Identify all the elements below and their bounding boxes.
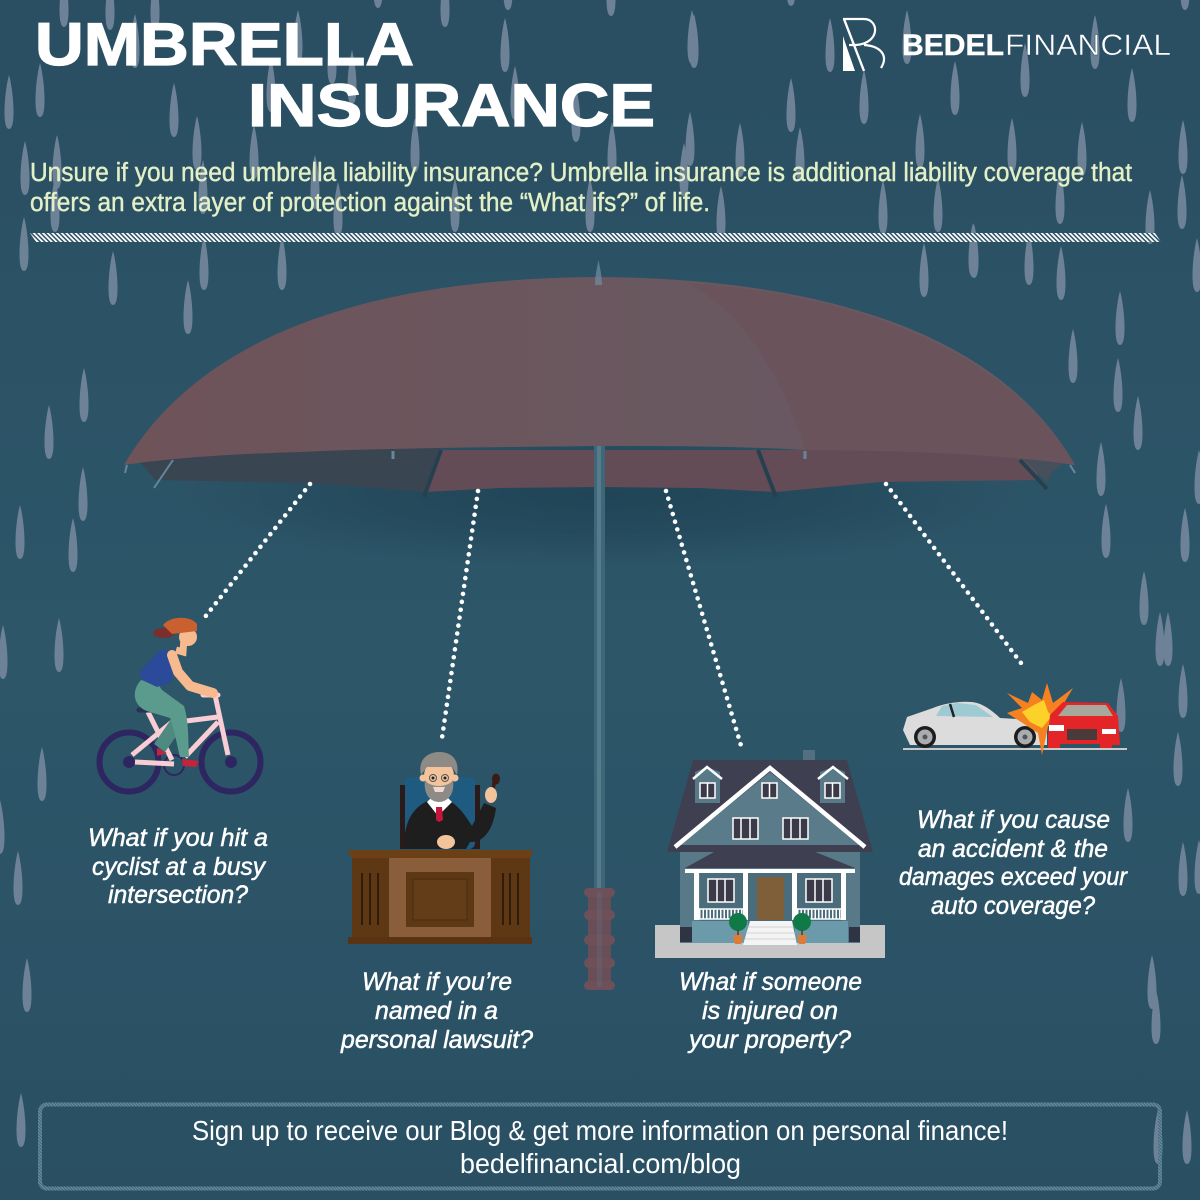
icon: logo mark <box>843 19 884 71</box>
rider <box>135 618 213 767</box>
question: accident: auto coverage? <box>931 892 1095 920</box>
question: cyclist <box>88 824 268 909</box>
footer text: Sign up to receive our Blog & get more information on personal finance! <box>192 1115 1008 1146</box>
bicycle <box>100 695 260 792</box>
gable <box>680 772 860 845</box>
chimney <box>803 750 815 770</box>
icon: house <box>655 750 885 958</box>
question: accident: damages exceed your <box>899 863 1129 891</box>
question: lawsuit <box>340 968 533 1054</box>
judge chair <box>400 777 480 849</box>
question: property: your property? <box>687 1026 851 1054</box>
umbrella handle <box>584 888 615 990</box>
house body <box>680 840 860 943</box>
potted plants <box>729 913 811 944</box>
icon: car crash <box>903 683 1127 755</box>
porch <box>694 873 846 921</box>
logo wordmark: FINANCIAL <box>1005 29 1171 62</box>
dotted connector lines <box>205 484 1024 749</box>
question: property: is injured on <box>702 997 838 1025</box>
umbrella pole <box>594 445 605 890</box>
shadow under umbrella <box>170 423 1030 567</box>
question: lawsuit: named in a <box>375 997 498 1025</box>
foundation and steps <box>680 921 860 945</box>
logo wordmark <box>902 29 1171 62</box>
judge figure <box>404 752 500 849</box>
footer text: bedelfinancial.com/blog <box>460 1148 741 1179</box>
footer text <box>192 1115 1008 1179</box>
intro text: offers an extra layer of protection against the “What ifs?” of life. <box>30 189 710 217</box>
question: accident: an accident & the <box>918 835 1108 863</box>
question: accident <box>899 806 1129 920</box>
umbrella underside <box>140 445 1064 492</box>
ground <box>655 925 885 958</box>
intro text: Unsure if you need umbrella liability insurance? Umbrella insurance is additional liability coverage that <box>30 159 1132 187</box>
title <box>35 11 655 139</box>
title: INSURANCE <box>248 72 655 139</box>
footer border <box>40 1104 1160 1188</box>
umbrella ribs <box>125 450 1075 497</box>
hatched divider <box>30 233 1161 242</box>
question: cyclist: What if you hit a <box>88 824 268 852</box>
footer call to action <box>40 1104 1160 1188</box>
judge desk <box>347 850 533 944</box>
main roof <box>667 760 873 852</box>
canopy right panel <box>687 283 1075 465</box>
umbrella canopy <box>124 277 1075 465</box>
porch roof <box>685 847 855 868</box>
question: property <box>679 968 862 1054</box>
question: property: What if someone <box>679 968 862 996</box>
umbrella <box>124 260 1075 990</box>
white car <box>903 702 1047 748</box>
icon: cyclist <box>100 618 260 792</box>
road line <box>903 748 1127 750</box>
explosion <box>1007 683 1073 755</box>
intro text <box>30 159 1132 217</box>
dormers <box>693 767 848 803</box>
icon: judge at desk <box>347 752 533 944</box>
logo wordmark: BEDEL <box>902 29 1004 62</box>
umbrella tip <box>595 260 602 285</box>
question: accident: What if you cause <box>917 806 1110 834</box>
question: cyclist: cyclist at a busy <box>92 853 266 881</box>
question: lawsuit: What if you’re <box>362 968 512 996</box>
title: UMBRELLA <box>35 11 414 78</box>
red car <box>1048 702 1120 748</box>
upper windows <box>700 783 840 839</box>
question: cyclist: intersection? <box>108 881 248 909</box>
logo: Bedel Financial <box>843 19 1171 71</box>
question: lawsuit: personal lawsuit? <box>340 1026 533 1054</box>
